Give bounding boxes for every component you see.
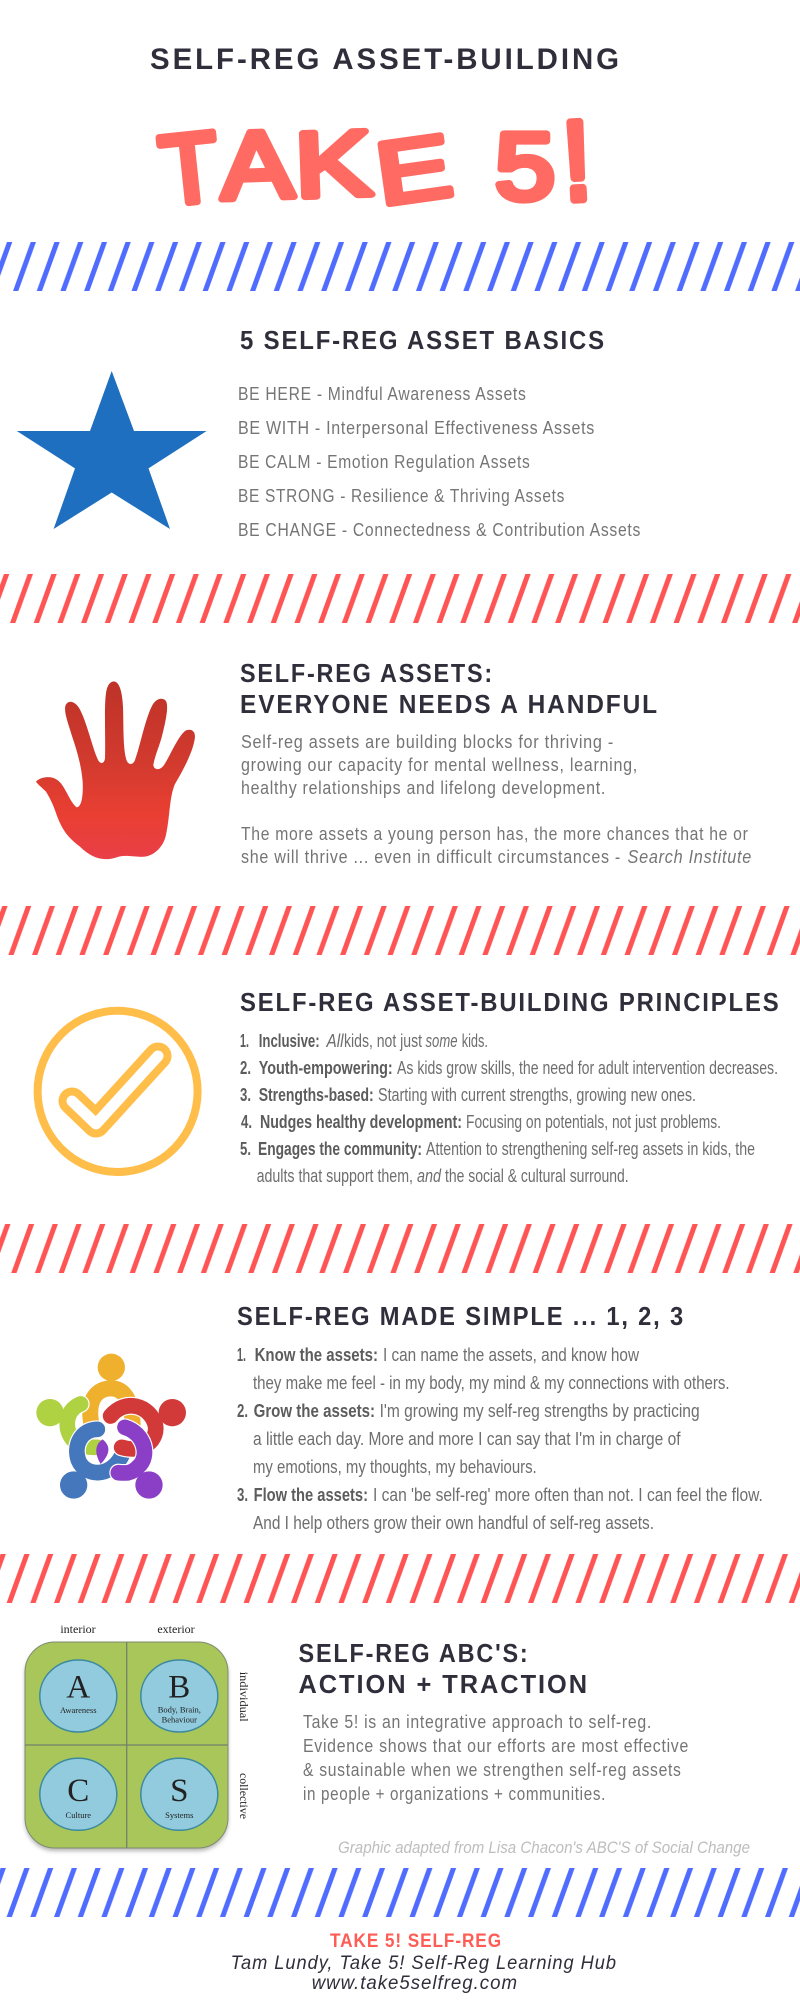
principles list: Nudges healthy development: bbox=[260, 1112, 462, 1132]
panel: everyone needs a handful bbox=[36, 658, 752, 867]
principles list: kids. bbox=[462, 1031, 488, 1051]
icon: gold check circle bbox=[38, 1011, 198, 1172]
caption: graphic credit: Graphic adapted from Lisa Chacon's ABC'S of Social Change bbox=[338, 1838, 750, 1857]
footer: credits: TAKE 5! SELF-REG bbox=[330, 1931, 502, 1952]
steps list: 3. bbox=[237, 1485, 248, 1505]
diagram: abcs quadrant: Culture bbox=[66, 1810, 91, 1820]
principles list: 3. bbox=[240, 1085, 251, 1105]
steps list: 2. bbox=[237, 1401, 248, 1421]
principles list: 4. bbox=[241, 1112, 252, 1132]
heading: self-reg assets bbox=[240, 658, 659, 719]
title: take 5! hand-lettered: T bbox=[155, 112, 224, 226]
panel: self-reg made simple bbox=[36, 1301, 763, 1533]
steps list: Grow the assets: bbox=[254, 1401, 375, 1421]
panel: self-reg abc's bbox=[25, 1622, 750, 1857]
principles list: 1. bbox=[240, 1031, 249, 1051]
title: take 5! hand-lettered: K bbox=[293, 112, 373, 217]
principles list bbox=[240, 1031, 778, 1186]
title: take 5! hand-lettered bbox=[155, 98, 594, 226]
diagram: abcs quadrant: exterior bbox=[157, 1622, 195, 1636]
title: take 5! hand-lettered: A bbox=[219, 111, 295, 220]
diagram: abcs quadrant: C bbox=[67, 1773, 89, 1809]
principles list: adults that support them, bbox=[257, 1166, 413, 1186]
title: self-reg asset-building: SELF-REG ASSET-BUILDING bbox=[150, 43, 622, 76]
text: building blocks: healthy relationships and lifelong development. bbox=[241, 778, 606, 798]
diagram: abcs quadrant: S bbox=[170, 1773, 188, 1809]
icon: blue star bbox=[17, 371, 207, 529]
heading: action + traction: SELF-REG ABC'S: bbox=[298, 1638, 530, 1668]
text: search institute quote: she will thrive ... even in difficult circumstances - bbox=[241, 847, 621, 867]
steps list: a little each day. More and more I can say that I'm in charge of bbox=[253, 1429, 681, 1449]
principles list: Youth-empowering: bbox=[259, 1058, 393, 1078]
principles list: All bbox=[326, 1031, 344, 1051]
diagram: abcs quadrant: Awareness bbox=[60, 1705, 97, 1715]
text: integrative approach bbox=[303, 1712, 689, 1804]
principles list: kids, not just bbox=[344, 1031, 422, 1051]
principles list: and bbox=[417, 1166, 442, 1186]
panel: asset-building principles bbox=[38, 987, 781, 1186]
title: take 5! hand-lettered: ! bbox=[560, 98, 594, 224]
title: take 5! hand-lettered: E bbox=[370, 117, 458, 224]
diagram: abcs quadrant: A bbox=[66, 1670, 90, 1706]
diagram: abcs quadrant: Body, Brain, bbox=[158, 1705, 201, 1715]
heading: made simple: SELF-REG MADE SIMPLE ... 1, 2, 3 bbox=[237, 1301, 685, 1331]
heading: asset basics: 5 SELF-REG ASSET BASICS bbox=[240, 325, 606, 355]
text: integrative approach: Take 5! is an integrative approach to self-reg. bbox=[303, 1712, 652, 1732]
panel: 5 self-reg asset basics bbox=[17, 325, 641, 540]
text: integrative approach: in people + organizations + communities. bbox=[303, 1784, 606, 1804]
principles list: some bbox=[426, 1031, 458, 1051]
footer: credits: Tam Lundy, Take 5! Self-Reg Learning Hub bbox=[231, 1953, 617, 1974]
principles list: 2. bbox=[240, 1058, 251, 1078]
diagram: abcs quadrant: individual bbox=[237, 1672, 251, 1722]
text: search institute quote bbox=[241, 824, 752, 867]
diagram: abcs quadrant: collective bbox=[237, 1773, 251, 1819]
steps list: Flow the assets: bbox=[254, 1485, 368, 1505]
text: search institute quote: Search Institute bbox=[628, 847, 752, 867]
principles list: the social & cultural surround. bbox=[445, 1166, 629, 1186]
steps list bbox=[237, 1345, 763, 1533]
principles list: Starting with current strengths, growing new ones. bbox=[378, 1085, 696, 1105]
heading: action + traction bbox=[298, 1638, 589, 1699]
footer: credits: www.take5selfreg.com bbox=[312, 1973, 518, 1994]
text: building blocks: Self-reg assets are building blocks for thriving - bbox=[241, 732, 614, 752]
text: building blocks: growing our capacity for mental wellness, learning, bbox=[241, 755, 638, 775]
text: building blocks bbox=[241, 732, 638, 798]
text: integrative approach: Evidence shows that our efforts are most effective bbox=[303, 1736, 689, 1756]
steps list: I can name the assets, and know how bbox=[383, 1345, 640, 1365]
principles list: Engages the community: bbox=[258, 1139, 422, 1159]
asset list: BE CHANGE - Connectedness & Contribution Assets bbox=[238, 520, 641, 540]
steps list: 1. bbox=[237, 1345, 246, 1365]
steps list: my emotions, my thoughts, my behaviours. bbox=[253, 1457, 537, 1477]
icon: five linked people bbox=[36, 1354, 186, 1499]
steps list: I'm growing my self-reg strengths by practicing bbox=[380, 1401, 700, 1421]
principles list: Focusing on potentials, not just problems. bbox=[466, 1112, 721, 1132]
steps list: Know the assets: bbox=[255, 1345, 378, 1365]
heading: self-reg assets: EVERYONE NEEDS A HANDFUL bbox=[240, 689, 659, 719]
diagram: abcs quadrant: Systems bbox=[165, 1810, 193, 1820]
title: take 5! hand-lettered: 5 bbox=[495, 113, 555, 220]
heading: action + traction: ACTION + TRACTION bbox=[298, 1669, 589, 1699]
icon: red hand bbox=[36, 681, 195, 859]
principles list: Strengths-based: bbox=[259, 1085, 374, 1105]
diagram: abcs quadrant: B bbox=[168, 1670, 190, 1706]
asset list: BE CALM - Emotion Regulation Assets bbox=[238, 452, 530, 472]
heading: self-reg assets: SELF-REG ASSETS: bbox=[240, 658, 494, 688]
principles list: Inclusive: bbox=[259, 1031, 320, 1051]
diagram: abcs quadrant: interior bbox=[60, 1622, 96, 1636]
principles list: 5. bbox=[240, 1139, 251, 1159]
asset list: BE HERE - Mindful Awareness Assets bbox=[238, 384, 526, 404]
diagram: abcs quadrant: Behaviour bbox=[162, 1714, 197, 1724]
diagram: abcs quadrant bbox=[25, 1622, 251, 1851]
footer: credits bbox=[231, 1931, 617, 1994]
asset list: BE WITH - Interpersonal Effectiveness Assets bbox=[238, 418, 595, 438]
steps list: And I help others grow their own handful of self-reg assets. bbox=[253, 1513, 654, 1533]
text: integrative approach: & sustainable when we strengthen self-reg assets bbox=[303, 1760, 682, 1780]
asset list bbox=[238, 384, 641, 540]
asset list: BE STRONG - Resilience & Thriving Assets bbox=[238, 486, 565, 506]
